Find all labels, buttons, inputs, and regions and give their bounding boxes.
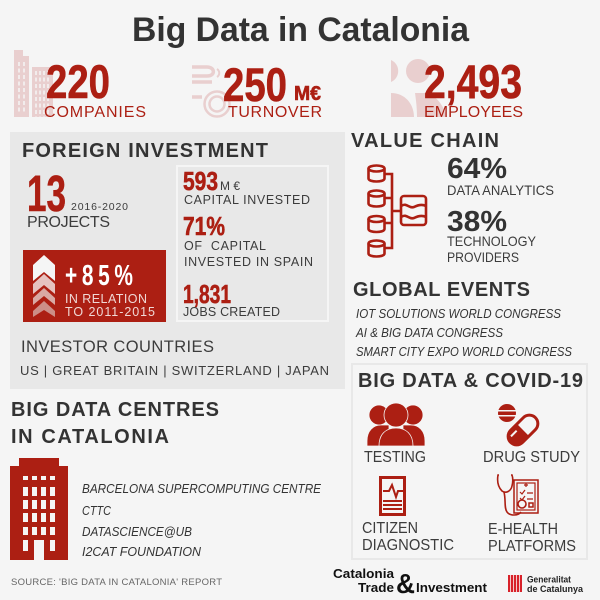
stat: data analytics: 64% bbox=[447, 153, 507, 185]
logo: catalonia trade and investment: Catalonia bbox=[333, 566, 395, 581]
projects stat: 13 bbox=[27, 165, 66, 222]
panel: big data and covid-19 bbox=[352, 364, 587, 559]
panel: capital figures bbox=[177, 166, 328, 321]
callout: +85%: +85% bbox=[65, 260, 138, 292]
centres list: BARCELONA SUPERCOMPUTING CENTRE bbox=[82, 481, 321, 496]
jobs created: JOBS CREATED bbox=[183, 305, 280, 319]
stat: data analytics: DATA ANALYTICS bbox=[447, 182, 554, 198]
stat: technology providers bbox=[447, 206, 537, 265]
label: drug study: DRUG STUDY bbox=[483, 449, 580, 466]
stat: technology providers: PROVIDERS bbox=[447, 249, 519, 265]
label: e-health platforms bbox=[488, 521, 576, 555]
capital invested: CAPITAL INVESTED bbox=[184, 193, 310, 207]
jobs created: 1,831 bbox=[183, 279, 231, 309]
jobs created bbox=[183, 279, 280, 319]
callout: +85%: IN RELATION bbox=[65, 292, 147, 306]
heading: big data centres: BIG DATA CENTRES bbox=[11, 399, 219, 421]
icon: stethoscope and chart bbox=[498, 475, 538, 515]
heading: big data and covid-19: BIG DATA & COVID-19 bbox=[358, 370, 583, 392]
employees number: 2,493 bbox=[424, 55, 522, 108]
stat: technology providers: TECHNOLOGY bbox=[447, 233, 537, 249]
label: e-health platforms: PLATFORMS bbox=[488, 538, 576, 555]
companies label: COMPANIES bbox=[44, 104, 146, 121]
section: global events bbox=[353, 279, 572, 359]
events list: AI & BIG DATA CONGRESS bbox=[355, 325, 503, 340]
investor countries heading: INVESTOR COUNTRIES bbox=[21, 338, 214, 356]
turnover unit: M€ bbox=[294, 83, 321, 105]
icon: generalitat shield bbox=[508, 575, 522, 592]
stat: technology providers: 38% bbox=[447, 206, 507, 238]
events list: SMART CITY EXPO WORLD CONGRESS bbox=[356, 344, 572, 359]
icon: diagnostic document bbox=[379, 476, 406, 516]
centres list: CTTC bbox=[82, 503, 112, 518]
label: citizen diagnostic: DIAGNOSTIC bbox=[362, 537, 454, 554]
heading: big data centres bbox=[11, 399, 219, 448]
capital invested bbox=[183, 166, 310, 207]
stat: companies bbox=[14, 50, 146, 121]
stat: data analytics bbox=[447, 153, 554, 198]
logo: catalonia trade and investment: & bbox=[396, 568, 415, 599]
share of capital: OF CAPITAL bbox=[184, 239, 266, 253]
source note: SOURCE: 'BIG DATA IN CATALONIA' REPORT bbox=[11, 577, 222, 588]
centres list: I2CAT FOUNDATION bbox=[82, 544, 202, 559]
projects stat bbox=[27, 165, 128, 231]
section: value chain bbox=[351, 130, 554, 265]
icon: pill and capsule bbox=[498, 404, 544, 451]
heading: global events: GLOBAL EVENTS bbox=[353, 279, 530, 301]
projects stat: 2016-2020 bbox=[71, 201, 128, 213]
share of capital: 71% bbox=[183, 211, 225, 241]
events list: IOT SOLUTIONS WORLD CONGRESS bbox=[356, 306, 561, 321]
projects stat: PROJECTS bbox=[27, 214, 110, 231]
panel: foreign investment bbox=[10, 132, 345, 389]
logo: catalonia trade and investment: Investment bbox=[416, 580, 488, 595]
heading: foreign investment: FOREIGN INVESTMENT bbox=[22, 140, 268, 162]
label: citizen diagnostic: CITIZEN bbox=[362, 520, 418, 537]
icon: people bbox=[391, 59, 447, 117]
label: testing: TESTING bbox=[364, 449, 426, 466]
icon: people group bbox=[367, 403, 425, 446]
logo: catalonia trade and investment: Trade bbox=[358, 580, 394, 595]
investor countries list: US | GREAT BRITAIN | SWITZERLAND | JAPAN bbox=[20, 363, 329, 378]
label: citizen diagnostic bbox=[362, 520, 454, 554]
logo: generalitat de catalunya: de Catalunya bbox=[527, 584, 584, 595]
turnover number: 250 bbox=[223, 58, 287, 111]
label: e-health platforms: E-HEALTH bbox=[488, 521, 558, 538]
stat: turnover bbox=[192, 58, 322, 121]
icon: coins bbox=[192, 67, 230, 116]
centres list: DATASCIENCE@UB bbox=[82, 524, 192, 539]
heading: value chain: VALUE CHAIN bbox=[351, 130, 499, 152]
heading: big data centres: IN CATALONIA bbox=[11, 426, 169, 448]
icon: buildings bbox=[14, 50, 53, 117]
capital invested: 593 bbox=[183, 166, 218, 196]
turnover label: TURNOVER bbox=[228, 104, 322, 121]
employees label: EMPLOYEES bbox=[424, 104, 523, 121]
stat: employees bbox=[391, 55, 523, 121]
logo: generalitat de catalunya: Generalitat bbox=[527, 574, 572, 586]
callout: +85% bbox=[23, 250, 166, 322]
title: Big Data in Catalonia bbox=[132, 11, 470, 49]
centres list bbox=[82, 481, 321, 559]
share of capital bbox=[183, 211, 313, 269]
section: big data centres bbox=[10, 399, 321, 560]
icon: rising arrows bbox=[33, 255, 55, 317]
logo: generalitat de catalunya bbox=[508, 574, 584, 595]
events list bbox=[355, 306, 572, 359]
share of capital: INVESTED IN SPAIN bbox=[184, 255, 313, 269]
capital invested: M€ bbox=[220, 179, 240, 193]
callout: +85%: TO 2011-2015 bbox=[65, 305, 155, 319]
icon: data flow bbox=[368, 166, 426, 256]
companies number: 220 bbox=[46, 55, 110, 108]
logo: catalonia trade and investment bbox=[333, 566, 488, 599]
icon: office building bbox=[10, 458, 68, 560]
